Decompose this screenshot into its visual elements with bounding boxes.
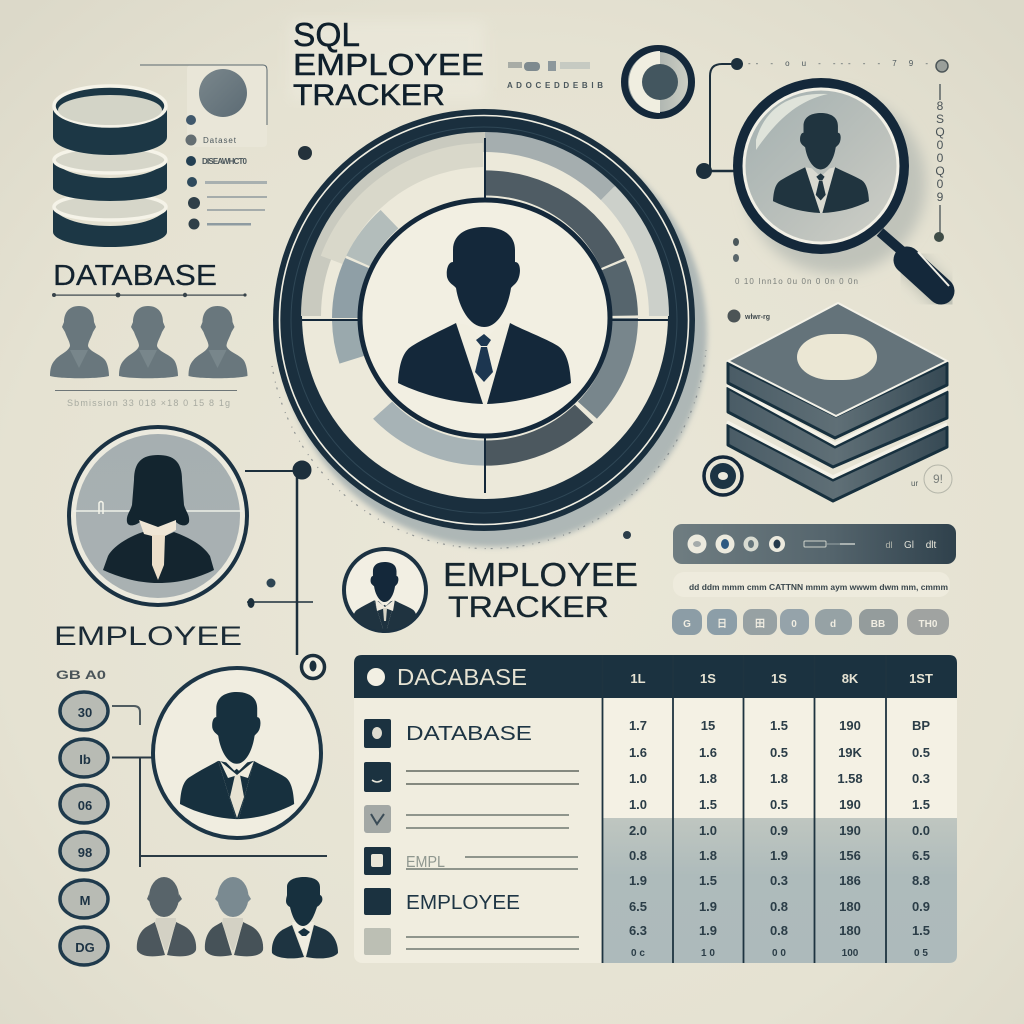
table values: 6.5 [912, 848, 930, 863]
table values: 0.3 [912, 771, 930, 786]
table values: BP [912, 718, 930, 733]
panel: database table: 1S [700, 671, 716, 686]
table values: 1.6 [699, 745, 717, 760]
heading: employee tracker: EMPLOYEE [443, 556, 638, 593]
title [290, 16, 485, 112]
table values: 190 [839, 797, 861, 812]
faint badge: 9! [933, 472, 943, 486]
table values: 1.9 [699, 899, 717, 914]
toolbar panel: dl [885, 540, 893, 550]
dot [298, 146, 312, 160]
table values: 0.8 [629, 848, 647, 863]
vertical label: 9 [937, 190, 944, 204]
panel: database table: DACABASE [397, 664, 527, 690]
row labels: EMPL [406, 854, 445, 871]
table header [354, 655, 957, 698]
person: dark right [272, 877, 338, 958]
text strip [673, 572, 950, 597]
vertical label: 8 [937, 99, 944, 113]
table values: 1.5 [699, 797, 717, 812]
table values: 1.7 [629, 718, 647, 733]
table gray rows [602, 818, 957, 963]
table values: 1.9 [770, 848, 788, 863]
small notes under magnifier: 0 10 Inn1o 0u 0n 0 0n 0 0n [735, 277, 858, 286]
vertical label: 0 [937, 151, 944, 165]
top diamond [728, 303, 947, 416]
table values: 1.8 [770, 771, 788, 786]
row labels: DATABASE [406, 723, 532, 745]
lens [733, 78, 909, 254]
person: gray left [137, 877, 196, 956]
table values: 6.5 [629, 899, 647, 914]
table values: 0 5 [914, 948, 928, 959]
table values: 0.9 [912, 899, 930, 914]
group: three gray people [50, 306, 248, 378]
connector lines [112, 706, 327, 867]
table values: 0 c [631, 948, 645, 959]
row labels [364, 719, 579, 955]
button row: TH0 [919, 619, 938, 630]
table values: 1.5 [912, 923, 930, 938]
table values: 0.0 [912, 823, 930, 838]
table values: 15 [701, 718, 715, 733]
inner disc [360, 200, 610, 436]
table values [629, 718, 930, 959]
panel: database details: Dataset [203, 136, 237, 145]
faint badge: ur [911, 479, 918, 488]
text strip: dd ddm mmm cmm CATTNN mmm aym wwwm dwm mm, cmmm [689, 583, 948, 592]
heading: employee tracker [443, 556, 638, 624]
heading: database: DATABASE [53, 260, 217, 292]
table values: 180 [839, 923, 861, 938]
icon: target ring [704, 457, 742, 495]
bottom row of people [137, 877, 338, 958]
person: woman [103, 455, 214, 583]
table values: 156 [839, 848, 861, 863]
button row: 日 [717, 618, 727, 630]
table values: 190 [839, 823, 861, 838]
toolbar panel: Gl [904, 540, 914, 551]
icon: top small legend [507, 61, 603, 90]
id pills column: 06 [78, 798, 92, 813]
icon: top small legend: A D O C E D D E B I B [507, 81, 603, 90]
row labels: EMPLOYEE [406, 892, 520, 914]
toolbar panel: dlt [926, 540, 937, 551]
table values: 0 0 [772, 948, 786, 959]
id pills column: 98 [78, 845, 92, 860]
table values: 100 [842, 948, 859, 959]
table values: 1.8 [699, 848, 717, 863]
vertical label: 0 [937, 177, 944, 191]
column lines [602, 655, 886, 963]
heading: employee tracker: TRACKER [448, 591, 609, 624]
caption under people: Sbmission 33 018 ×18 0 15 8 1g [67, 398, 230, 408]
table values: 6.3 [629, 923, 647, 938]
outer dark ring [273, 109, 695, 531]
table values: 2.0 [629, 823, 647, 838]
id pills column: M [80, 893, 90, 908]
crosshair lines [302, 138, 668, 493]
panel: database table: 8K [842, 671, 859, 686]
button row: BB [871, 619, 885, 630]
vertical label: S [936, 112, 944, 126]
employee profile circle [69, 427, 247, 605]
person [180, 692, 294, 819]
light annulus [302, 133, 668, 499]
table values: 1.9 [629, 873, 647, 888]
small notes under magnifier [728, 238, 858, 322]
layer 3 [728, 425, 947, 501]
shadow [281, 121, 707, 547]
connector: magnifier link: -- - o u - --- - - 7 9 - [748, 59, 928, 68]
table values: 0.5 [770, 745, 788, 760]
title: SQL [293, 16, 360, 53]
panel: database table [354, 655, 957, 963]
table values: 1.5 [699, 873, 717, 888]
segmented ring [287, 127, 683, 509]
button row: d [830, 619, 836, 630]
faint badge [911, 465, 952, 493]
table values: 1.58 [837, 771, 863, 786]
person: light gray middle [205, 877, 263, 956]
table values: 1.5 [912, 797, 930, 812]
table values: 1.0 [629, 771, 647, 786]
table light rows [602, 698, 957, 818]
panel: database details [140, 65, 267, 230]
toolbar panel [673, 524, 956, 564]
table values: 1.6 [629, 745, 647, 760]
button row: G [683, 619, 691, 630]
badge: employee tracker person [344, 549, 426, 633]
icon: top small lens [624, 48, 692, 116]
heading: employee: EMPLOYEE [54, 621, 242, 651]
vertical label: Q [935, 125, 945, 139]
person: central [398, 227, 571, 404]
table values: 19K [838, 745, 863, 760]
table values: 1.8 [699, 771, 717, 786]
table values: 8.8 [912, 873, 930, 888]
table values: 1.0 [699, 823, 717, 838]
icon: database cylinder [53, 86, 167, 247]
handle [880, 232, 903, 252]
panel: database details: DISEAWHCT0 [202, 157, 248, 166]
collar and tie [220, 761, 254, 818]
table values: 186 [839, 873, 861, 888]
layer 1 [728, 363, 947, 438]
vertical label [934, 84, 945, 242]
table values: 0.5 [770, 797, 788, 812]
central circular dashboard [272, 109, 707, 549]
table values: 1.0 [629, 797, 647, 812]
vertical label: 0 [937, 138, 944, 152]
panel: database table: 1L [630, 671, 646, 686]
person: magnifier [773, 113, 869, 213]
table values: 0.8 [770, 899, 788, 914]
small label: GB A0 [56, 668, 106, 682]
table values: 190 [839, 718, 861, 733]
connector: magnifier link [696, 58, 948, 179]
person circle [153, 668, 321, 838]
vertical label: Q [935, 164, 945, 178]
table values: 1.9 [699, 923, 717, 938]
annulus shading [311, 142, 659, 316]
shadow [746, 94, 926, 274]
button row: 0 [791, 619, 797, 630]
table values: 180 [839, 899, 861, 914]
table values: 1 0 [701, 948, 715, 959]
dot [623, 531, 631, 539]
panel: database table: 1S [771, 671, 787, 686]
icon: small target [302, 656, 324, 678]
table values: 1.5 [770, 718, 788, 733]
connector: employee to center [245, 461, 313, 655]
id pills column: DG [75, 940, 95, 955]
button row [672, 609, 949, 635]
database underline with dots [52, 293, 247, 297]
id pills column [60, 692, 108, 965]
table values: 0.3 [770, 873, 788, 888]
magnifier [733, 78, 949, 300]
icon: knob [199, 69, 247, 117]
title: EMPLOYEE [293, 47, 484, 82]
button row: 田 [755, 618, 765, 630]
panel: database table: 1ST [909, 671, 933, 686]
table values: 0.9 [770, 823, 788, 838]
id pills column: 30 [78, 705, 92, 720]
small notes under magnifier: wlwr-rg [744, 314, 770, 321]
id pills column: Ib [79, 752, 91, 767]
title: TRACKER [293, 79, 445, 112]
table values: 0.8 [770, 923, 788, 938]
layer 2 [728, 388, 947, 467]
icon: layered stack [727, 303, 947, 501]
table values: 0.5 [912, 745, 930, 760]
